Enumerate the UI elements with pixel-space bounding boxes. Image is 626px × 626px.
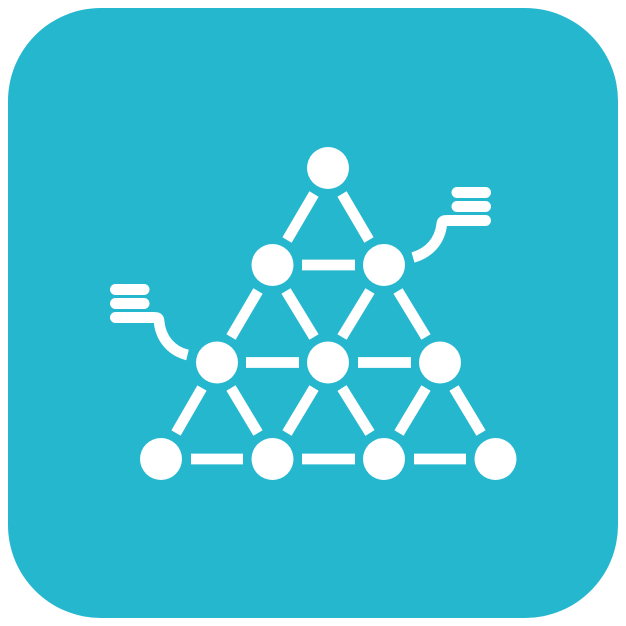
- connectors: horizontal links: [191, 265, 466, 459]
- network nodes: [140, 147, 516, 480]
- callout: left label lines: [110, 284, 188, 355]
- callout: right label lines: [413, 187, 491, 258]
- pyramid connectors: [176, 194, 481, 459]
- connectors: diagonal links: [176, 194, 481, 433]
